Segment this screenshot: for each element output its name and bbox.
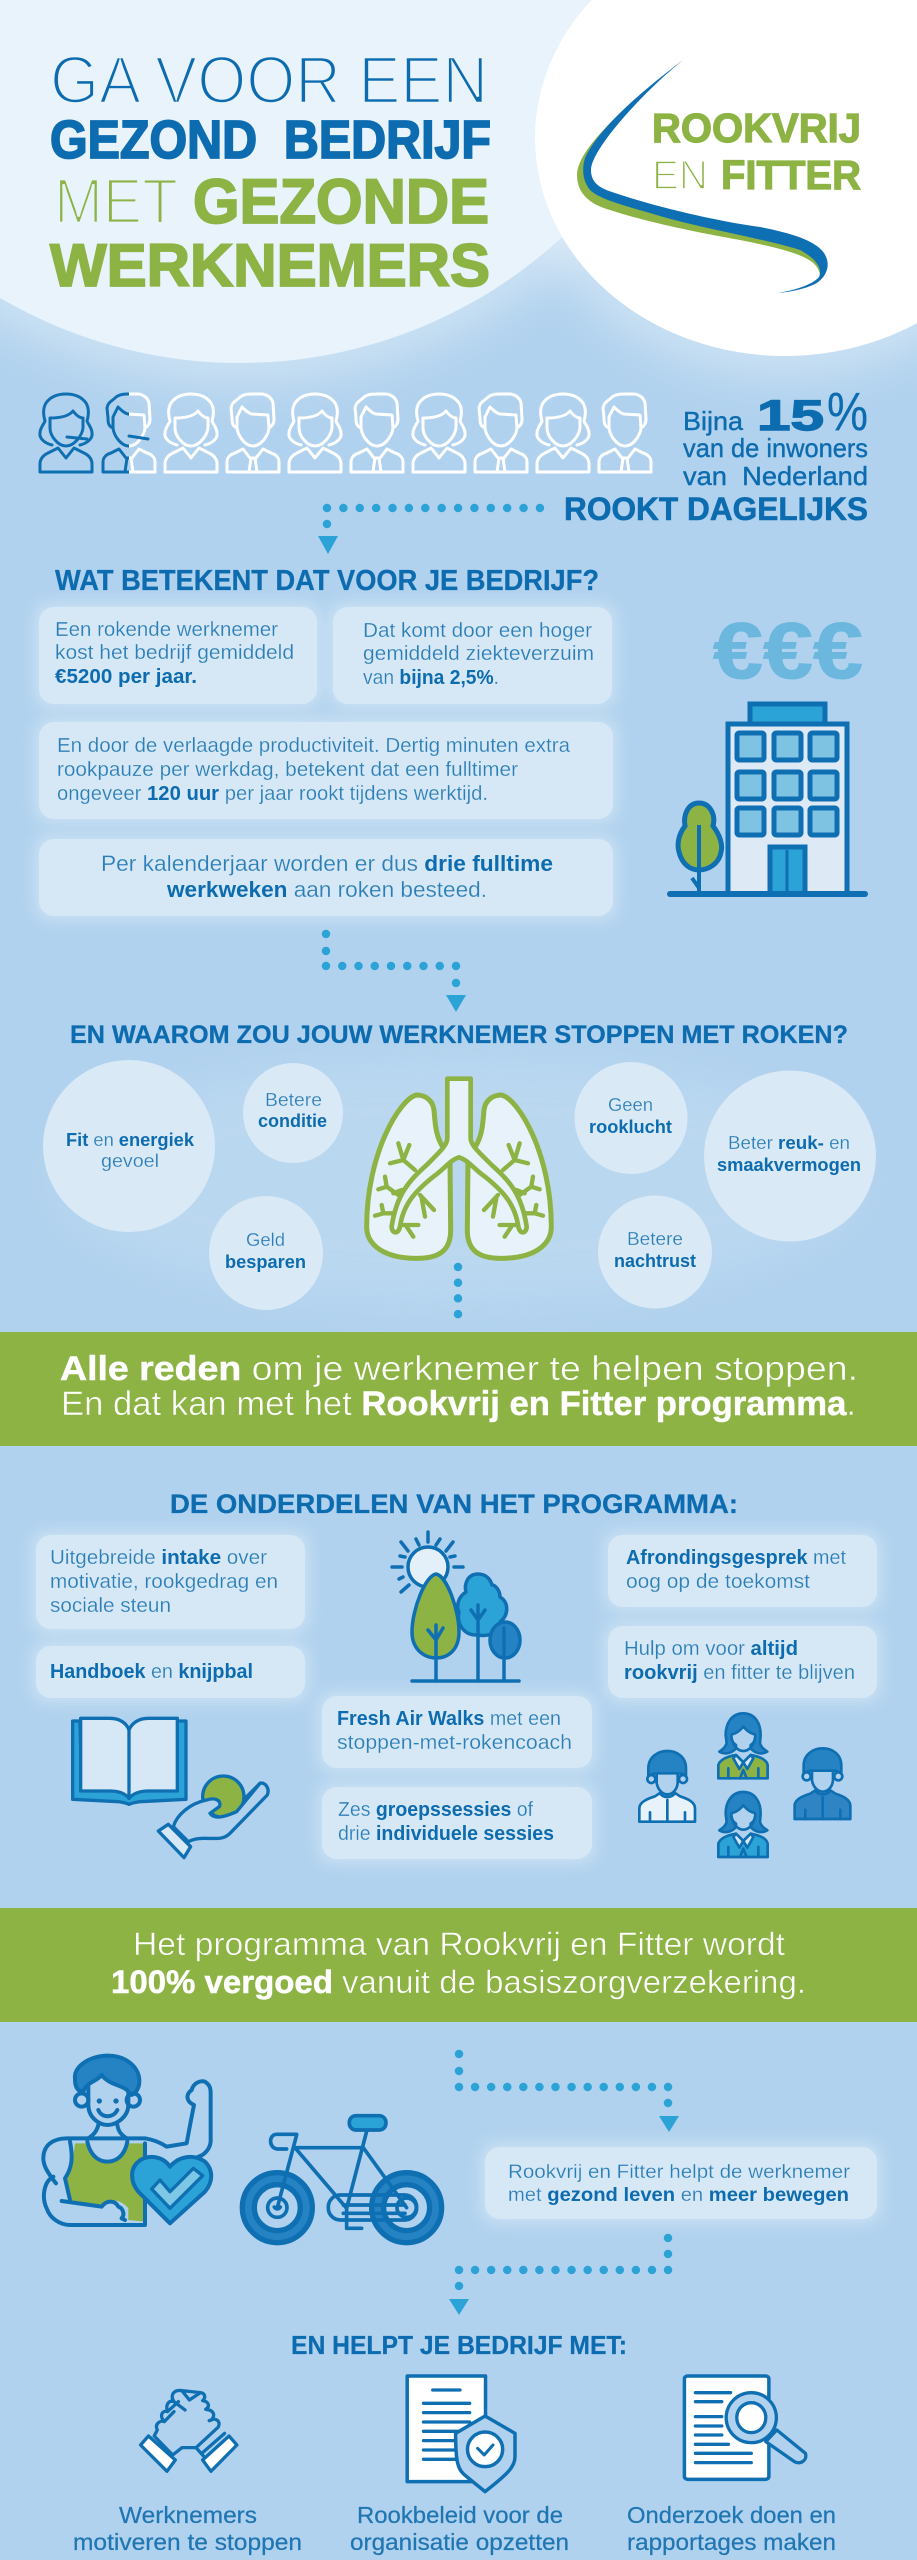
caption: werknemers motiveren [73, 2502, 302, 2555]
panel: helpt de werknemer: Rookvrij en Fitter helpt de werknemer [508, 2162, 851, 2183]
rear wheel [378, 2179, 436, 2237]
panel: cost per year [39, 607, 317, 704]
icon: group of four participants [639, 1713, 850, 1857]
panel: intake: motivatie, rookgedrag en [50, 1571, 278, 1593]
caption: rookbeleid: organisatie opzetten [350, 2529, 569, 2555]
participant: man in blue [795, 1748, 850, 1819]
icon: book and hand with squeeze ball [73, 1718, 268, 1858]
panel: afrondingsgesprek [608, 1535, 877, 1607]
logo wordmark [652, 105, 861, 198]
header shape: logo bubble [535, 0, 917, 356]
heading: helpt je bedrijf: EN HELPT JE BEDRIJF MET: [291, 2330, 627, 2360]
panel: handboek [36, 1646, 305, 1698]
bubble: betere conditie: Betere [265, 1090, 322, 1110]
bubble: reuk en smaak [704, 1070, 876, 1242]
panel: absenteeism: Dat komt door een hoger [363, 620, 592, 642]
bubble: geld besparen [209, 1196, 323, 1310]
caption: onderzoek: Onderzoek doen en [627, 2502, 836, 2528]
panel: absenteeism: gemiddeld ziekteverzuim [363, 643, 594, 665]
logo wordmark: ROOKVRIJ [652, 105, 861, 151]
caption: rookbeleid [350, 2502, 569, 2555]
panel: sessies [322, 1787, 592, 1859]
frame [271, 2125, 407, 2208]
panel: cost per year: Een rokende werknemer [55, 619, 278, 641]
panel: hulp: Hulp om voor altijd [624, 1638, 798, 1660]
arrow: dotted to section two [326, 934, 466, 1012]
icon: policy document with shield [407, 2376, 515, 2492]
statistic: 15 percent: ROOKT DAGELIJKS [564, 491, 868, 527]
statistic: 15 percent: Bijna [683, 406, 744, 436]
panel: absenteeism [333, 607, 612, 704]
panel: three working weeks: Per kalenderjaar worden er dus drie fulltime [101, 851, 553, 876]
icon: clasped hands [141, 2390, 237, 2471]
title: GEZOND BEDRIJF [50, 110, 491, 170]
banner: alle reden: En dat kan met het Rookvrij en Fitter programma . [61, 1385, 856, 1423]
panel: three working weeks [39, 839, 613, 916]
banner: vergoed: 100% vergoed vanuit de basiszorgverzekering. [111, 1964, 806, 2000]
panel: fresh air walks: Fresh Air Walks met een [337, 1708, 561, 1730]
heading: waarom stoppen: EN WAAROM ZOU JOUW WERKNEMER STOPPEN MET ROKEN? [70, 1021, 848, 1049]
heading: wat betekent dat: WAT BETEKENT DAT VOOR JE BEDRIJF? [55, 565, 599, 597]
chain [328, 2195, 417, 2220]
bubble: reuk en smaak: Beter reuk- en [728, 1133, 850, 1153]
arrow: dotted to helper box [459, 2054, 679, 2132]
bubble: betere nachtrust [598, 1196, 712, 1308]
banner: vergoed [0, 1908, 917, 2022]
panel: productivity: En door de verlaagde productiviteit. Dertig minuten extra [57, 735, 571, 757]
bubble: betere conditie [243, 1063, 343, 1163]
icon: sporty man with heart [43, 2056, 211, 2225]
title [50, 43, 491, 299]
logo wordmark: FITTER [721, 152, 861, 198]
panel: afrondingsgesprek: Afrondingsgesprek met [626, 1547, 846, 1569]
banner: alle reden: Alle reden om je werknemer te helpen stoppen. [60, 1350, 858, 1388]
saddle [349, 2116, 386, 2130]
bubble: fit en energiek: gevoel [101, 1151, 159, 1171]
caption: onderzoek: rapportages maken [627, 2529, 836, 2555]
persons 3 to 10 [165, 394, 651, 472]
participant: woman in light blue [718, 1792, 768, 1857]
panel: sessies: Zes groepssessies of [338, 1799, 533, 1821]
caption: werknemers motiveren: motiveren te stoppen [73, 2529, 302, 2555]
panel: intake: Uitgebreide intake over [50, 1547, 267, 1569]
panel: helpt de werknemer: met gezond leven en meer bewegen [508, 2185, 849, 2206]
panel: productivity: rookpauze per werkdag, betekent dat een fulltimer [57, 759, 518, 781]
logo swoosh [577, 60, 828, 293]
title: MET [54, 165, 178, 237]
icon: lungs [367, 1079, 551, 1258]
icon: report with magnifier [684, 2376, 806, 2479]
bubble: betere nachtrust: nachtrust [614, 1251, 696, 1271]
icon: euro signs: €€€ [713, 606, 863, 695]
banner: alle reden [0, 1332, 917, 1446]
bubble: geen rooklucht [574, 1062, 688, 1174]
panel: handboek: Handboek en knijpbal [50, 1661, 253, 1683]
icon: sun and trees [392, 1532, 520, 1681]
icon: office building with tree [670, 704, 865, 894]
heading: onderdelen: DE ONDERDELEN VAN HET PROGRAMMA: [170, 1489, 738, 1519]
bubble: geld besparen: Geld [246, 1230, 285, 1250]
bubble: reuk en smaak: smaakvermogen [717, 1155, 861, 1175]
bubble: betere conditie: conditie [258, 1111, 327, 1131]
arrow: dotted to company help [449, 2238, 668, 2315]
front wheel [248, 2179, 306, 2237]
panel: absenteeism: van bijna 2,5%. [363, 667, 499, 689]
header shape: title bubble [0, 0, 715, 363]
bubble: geen rooklucht: rooklucht [589, 1117, 672, 1137]
arrow: dotted to section one [318, 508, 540, 554]
panel: productivity: ongeveer 120 uur per jaar rookt tijdens werktijd. [57, 783, 488, 805]
bubble: geld besparen: besparen [225, 1252, 306, 1272]
title: GEZONDE [193, 167, 489, 237]
bubble: fit en energiek [43, 1060, 215, 1232]
panel: cost per year: kost het bedrijf gemiddeld [55, 642, 294, 664]
caption: rookbeleid: Rookbeleid voor de [357, 2502, 563, 2528]
statistic: 15 percent: van Nederland [683, 461, 868, 491]
statistic: 15 percent [564, 382, 868, 527]
panel: three working weeks: werkweken aan roken besteed. [166, 877, 487, 902]
statistic: 15 percent: % [827, 382, 868, 442]
panel: fresh air walks [322, 1696, 592, 1768]
panel: afrondingsgesprek: oog op de toekomst [626, 1571, 810, 1593]
people row: one and a half of ten smokers [40, 394, 651, 472]
person 2: half smoker [103, 394, 155, 472]
statistic: 15 percent: van de inwoners [683, 433, 868, 463]
panel: intake [36, 1535, 305, 1629]
bubble: fit en energiek: Fit en energiek [66, 1130, 195, 1150]
title: WERKNEMERS [50, 232, 490, 299]
panel: hulp: rookvrij en fitter te blijven [624, 1662, 855, 1684]
arrow: dots to green banner [454, 1267, 462, 1314]
bubble: geen rooklucht: Geen [608, 1095, 653, 1115]
logo wordmark: EN [652, 152, 708, 198]
panel: intake: sociale steun [50, 1595, 171, 1617]
panel: sessies: drie individuele sessies [338, 1823, 554, 1845]
panel: hulp [608, 1626, 877, 1698]
caption: werknemers motiveren: Werknemers [119, 2502, 257, 2528]
panel: productivity [39, 722, 613, 819]
banner: vergoed: Het programma van Rookvrij en Fitter wordt [133, 1926, 785, 1962]
panel: helpt de werknemer [485, 2147, 877, 2219]
bubble: betere nachtrust: Betere [627, 1229, 683, 1249]
participant: woman in green [718, 1713, 768, 1778]
person 1: smoker [40, 394, 92, 472]
statistic: 15 percent: 15 [757, 392, 824, 440]
logo: Rookvrij en Fitter [577, 60, 861, 293]
caption: onderzoek [627, 2502, 836, 2555]
panel: fresh air walks: stoppen-met-rokencoach [337, 1732, 572, 1754]
panel: cost per year: €5200 per jaar. [55, 666, 197, 688]
icon: bicycle [248, 2116, 436, 2237]
title: GA VOOR EEN [50, 43, 488, 118]
participant: man in white [639, 1751, 695, 1822]
